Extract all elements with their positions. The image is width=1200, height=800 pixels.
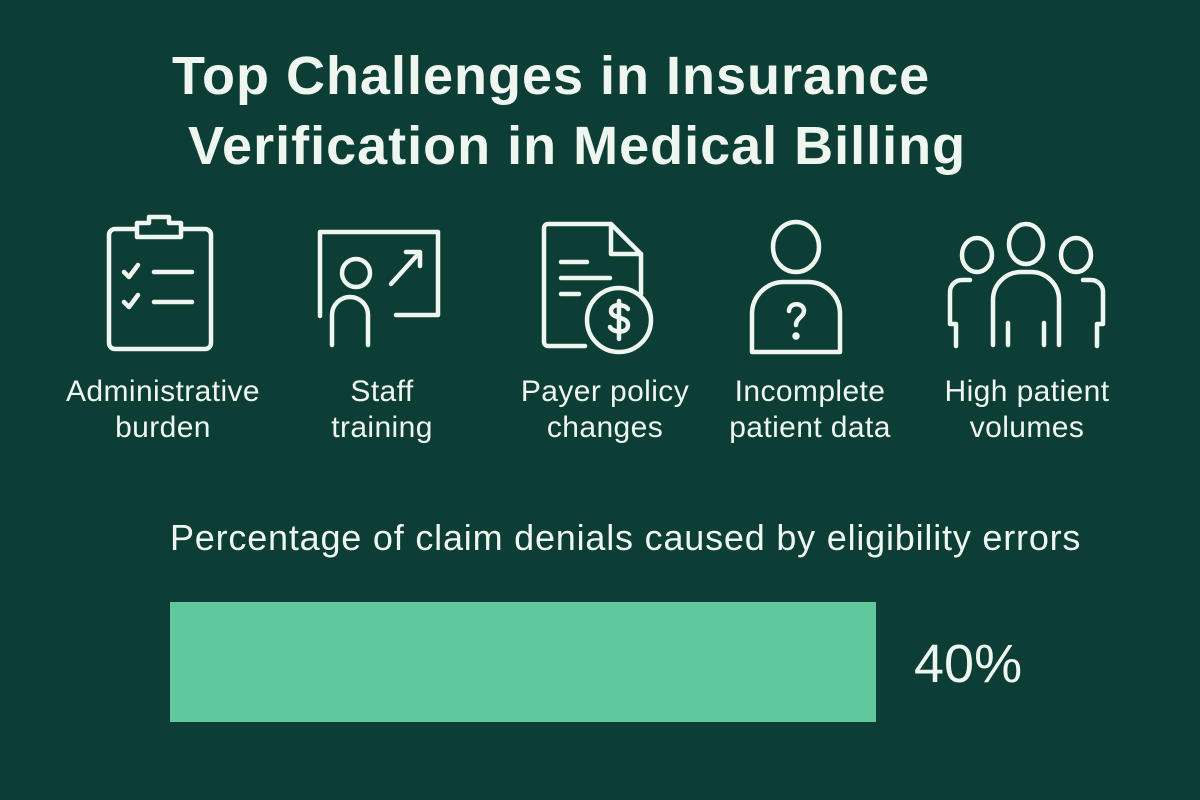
label: administrative burden: burden (115, 411, 211, 444)
chart subtitle: Percentage of claim denials caused by eligibility errors (170, 517, 1081, 558)
title: Verification in Medical Billing (188, 116, 966, 176)
label: payer policy changes: changes (547, 411, 663, 444)
label: staff training: Staff (350, 375, 414, 408)
label: incomplete patient data (729, 375, 891, 444)
icon: clipboard (109, 217, 211, 349)
label: payer policy changes (521, 375, 689, 444)
icon: person with question (752, 222, 840, 352)
icon: group (950, 224, 1103, 346)
bar chart (170, 602, 876, 722)
label: high patient volumes (945, 375, 1109, 444)
title: Top Challenges in Insurance (172, 46, 930, 106)
icon: document with dollar (544, 224, 651, 352)
value label: 40% (914, 634, 1022, 694)
label: incomplete patient data: Incomplete (735, 375, 885, 408)
icons row (106, 214, 1106, 354)
label: incomplete patient data: patient data (729, 411, 891, 444)
title (172, 46, 966, 176)
label: staff training: training (331, 411, 433, 444)
label: administrative burden (66, 375, 260, 444)
label: staff training (331, 375, 433, 444)
icon: presenter board (320, 232, 438, 345)
label: payer policy changes: Payer policy (521, 375, 689, 408)
label: administrative burden: Administrative (66, 375, 260, 408)
label: high patient volumes: High patient (945, 375, 1109, 408)
label: high patient volumes: volumes (970, 411, 1084, 444)
